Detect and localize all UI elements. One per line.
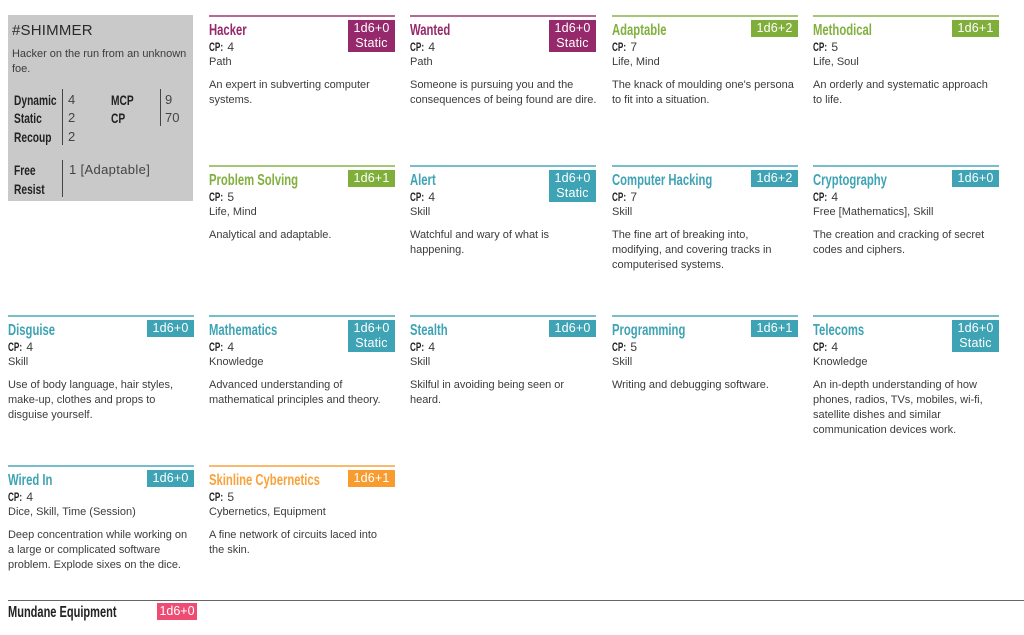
card: Alert: happening.	[410, 244, 464, 256]
card: Wired In: a large or complicated software	[8, 544, 160, 556]
stats: dynamic, static, recoup: 70	[165, 110, 179, 125]
stats: dynamic, static, recoup: Recoup	[14, 129, 51, 145]
character description	[12, 48, 186, 74]
card: Telecoms: satellite dishes and similar	[813, 408, 941, 420]
card: Mathematics: 4	[227, 340, 234, 354]
card: Wanted: Static	[556, 36, 589, 50]
card: Programming: 1d6+1	[756, 321, 793, 335]
stats: dynamic, static, recoup	[14, 89, 179, 197]
card: Wanted: Path	[410, 56, 433, 68]
dice badge: 1d6+0	[159, 604, 195, 618]
card: Programming: Programming	[612, 322, 685, 339]
card: Hacker: 4	[227, 40, 234, 54]
card: Adaptable: Life, Mind	[612, 56, 660, 68]
card: Methodical	[813, 15, 999, 106]
card: Problem Solving: Problem Solving	[209, 172, 298, 189]
stats: dynamic, static, recoup: Free	[14, 162, 36, 178]
card: Hacker: An expert in subverting computer	[209, 78, 370, 90]
card: Wanted: CP:	[410, 40, 424, 54]
card: Programming	[612, 315, 798, 390]
card: Cryptography: 1d6+0	[957, 171, 994, 185]
card: Wanted: Wanted	[410, 22, 450, 39]
card: Adaptable: Adaptable	[612, 22, 667, 39]
card: Methodical: 5	[831, 40, 838, 54]
card: Telecoms: Static	[959, 336, 992, 350]
card: Wanted: 4	[428, 40, 435, 54]
card: Stealth: Skill	[410, 356, 430, 368]
character description: Hacker on the run from an unknown	[12, 48, 186, 60]
card: Programming: Writing and debugging software.	[612, 378, 769, 390]
card: Disguise: Skill	[8, 356, 28, 368]
card: Computer Hacking: CP:	[612, 190, 626, 204]
card: Adaptable	[612, 15, 798, 106]
card: Cryptography: CP:	[813, 190, 827, 204]
card: Disguise	[8, 315, 194, 420]
card: Skinline Cybernetics	[209, 465, 395, 556]
card: Methodical: 1d6+1	[957, 21, 994, 35]
card: Stealth	[410, 315, 596, 406]
card: Hacker: systems.	[209, 94, 252, 106]
section: Mundane Equipment	[8, 600, 1024, 620]
card: Mathematics: Knowledge	[209, 356, 263, 368]
card: Cryptography: codes and ciphers.	[813, 244, 905, 256]
card: Telecoms: An in-depth understanding of how	[813, 378, 977, 390]
card: Wired In: Deep concentration while working on	[8, 528, 187, 540]
card: Methodical: CP:	[813, 40, 827, 54]
card: Skinline Cybernetics: Skinline Cybernetics	[209, 472, 320, 489]
card: Programming: 5	[630, 340, 637, 354]
card: Mathematics: mathematical principles and theory.	[209, 394, 381, 406]
card: Alert: 4	[428, 190, 435, 204]
stats: dynamic, static, recoup: 1 [Adaptable]	[69, 162, 150, 177]
stats: dynamic, static, recoup: Static	[14, 110, 42, 126]
card: Adaptable: The knack of moulding one's persona	[612, 78, 794, 90]
card: Skinline Cybernetics: Cybernetics, Equipment	[209, 506, 326, 518]
card: Computer Hacking	[612, 165, 798, 270]
card: Methodical: Methodical	[813, 22, 872, 39]
card: Skinline Cybernetics: A fine network of circuits laced into	[209, 528, 377, 540]
panel: character summary	[8, 15, 193, 201]
card: Telecoms: phones, radios, TVs, mobiles, wi-fi,	[813, 394, 983, 406]
card: Stealth: 4	[428, 340, 435, 354]
card: Telecoms	[813, 315, 999, 436]
card: Adaptable: 7	[630, 40, 637, 54]
card: Problem Solving: Analytical and adaptable.	[209, 228, 331, 240]
section heading: Mundane Equipment	[8, 604, 117, 620]
card: Stealth: 1d6+0	[554, 321, 591, 335]
card: Computer Hacking: computerised systems.	[612, 258, 724, 270]
card: Stealth: heard.	[410, 394, 441, 406]
character description: foe.	[12, 62, 30, 74]
card: Alert: Static	[556, 186, 589, 200]
card: Cryptography: 4	[831, 190, 838, 204]
card: Hacker: Static	[355, 36, 388, 50]
stats: dynamic, static, recoup: 2	[68, 110, 75, 125]
stats: dynamic, static, recoup: CP	[111, 110, 125, 126]
card: Mathematics: Static	[355, 336, 388, 350]
card: Telecoms: 1d6+0	[957, 321, 994, 335]
card: Skinline Cybernetics: CP:	[209, 490, 223, 504]
stats: dynamic, static, recoup: MCP	[111, 92, 134, 108]
card: Hacker: 1d6+0	[353, 21, 390, 35]
card: Adaptable: to fit into a situation.	[612, 94, 709, 106]
card: Wired In: Wired In	[8, 472, 52, 489]
card: Alert	[410, 165, 596, 256]
card: Adaptable: 1d6+2	[756, 21, 793, 35]
card: Stealth: Stealth	[410, 322, 448, 339]
card: Disguise: make-up, clothes and props to	[8, 394, 155, 406]
card: Methodical: Life, Soul	[813, 56, 859, 68]
card: Mathematics: Advanced understanding of	[209, 378, 342, 390]
card: Wanted: 1d6+0	[554, 21, 591, 35]
card: Methodical: to life.	[813, 94, 842, 106]
card: Disguise: CP:	[8, 340, 22, 354]
character name: #SHIMMER	[12, 22, 93, 38]
card: Stealth: Skilful in avoiding being seen or	[410, 378, 564, 390]
card: Adaptable: CP:	[612, 40, 626, 54]
card: Programming: Skill	[612, 356, 632, 368]
stats: dynamic, static, recoup: 4	[68, 92, 75, 107]
card: Alert: CP:	[410, 190, 424, 204]
card: Hacker: Hacker	[209, 22, 247, 39]
card: Wired In: CP:	[8, 490, 22, 504]
card: Wired In	[8, 465, 194, 570]
card: Computer Hacking: 7	[630, 190, 637, 204]
card: Hacker	[209, 15, 395, 106]
card: Problem Solving: 1d6+1	[353, 171, 390, 185]
card: Skinline Cybernetics: 1d6+1	[353, 471, 390, 485]
card: Cryptography: The creation and cracking of secret	[813, 228, 984, 240]
card: Disguise: 1d6+0	[152, 321, 189, 335]
stats: dynamic, static, recoup: 9	[165, 92, 172, 107]
card: Disguise: Disguise	[8, 322, 55, 339]
card: Disguise: Use of body language, hair styles,	[8, 378, 173, 390]
card: Problem Solving: Life, Mind	[209, 206, 257, 218]
card: Telecoms: Telecoms	[813, 322, 864, 339]
card: Wired In: 4	[26, 490, 33, 504]
stats: dynamic, static, recoup: Resist	[14, 181, 45, 197]
card: Wired In: problem. Explode sixes on the dice.	[8, 558, 181, 570]
card: Stealth: CP:	[410, 340, 424, 354]
card: Computer Hacking: The fine art of breaking into,	[612, 228, 748, 240]
card: Mathematics: Mathematics	[209, 322, 277, 339]
card: Cryptography: Cryptography	[813, 172, 887, 189]
card: Problem Solving	[209, 165, 395, 240]
card: Mathematics: 1d6+0	[353, 321, 390, 335]
stats: dynamic, static, recoup: Dynamic	[14, 92, 57, 108]
card: Skinline Cybernetics: 5	[227, 490, 234, 504]
card: Cryptography	[813, 165, 999, 256]
card: Mathematics	[209, 315, 395, 406]
card: Alert: Watchful and wary of what is	[410, 228, 549, 240]
stats: dynamic, static, recoup: 2	[68, 129, 75, 144]
card: Hacker: CP:	[209, 40, 223, 54]
card: Telecoms: communication devices work.	[813, 424, 956, 436]
card: Skinline Cybernetics: the skin.	[209, 544, 250, 556]
card: Disguise: 4	[26, 340, 33, 354]
card: Computer Hacking: 1d6+2	[756, 171, 793, 185]
card: Telecoms: CP:	[813, 340, 827, 354]
card: Wanted	[410, 15, 596, 106]
card: Alert: Skill	[410, 206, 430, 218]
card: Mathematics: CP:	[209, 340, 223, 354]
card: Telecoms: 4	[831, 340, 838, 354]
card: Hacker: Path	[209, 56, 232, 68]
card: Telecoms: Knowledge	[813, 356, 867, 368]
card: Methodical: An orderly and systematic approach	[813, 78, 988, 90]
card: Alert: 1d6+0	[554, 171, 591, 185]
card: Wanted: Someone is pursuing you and the	[410, 78, 573, 90]
card: Computer Hacking: Skill	[612, 206, 632, 218]
card: Alert: Alert	[410, 172, 436, 189]
card: Problem Solving: CP:	[209, 190, 223, 204]
card: Problem Solving: 5	[227, 190, 234, 204]
card: Wired In: Dice, Skill, Time (Session)	[8, 506, 136, 518]
card: Wired In: 1d6+0	[152, 471, 189, 485]
card: Computer Hacking: modifying, and covering tracks in	[612, 244, 772, 256]
card: Programming: CP:	[612, 340, 626, 354]
card: Cryptography: Free [Mathematics], Skill	[813, 206, 933, 218]
card: Disguise: disguise yourself.	[8, 408, 93, 420]
card: Wanted: consequences of being found are dire.	[410, 94, 596, 106]
card: Computer Hacking: Computer Hacking	[612, 172, 712, 189]
